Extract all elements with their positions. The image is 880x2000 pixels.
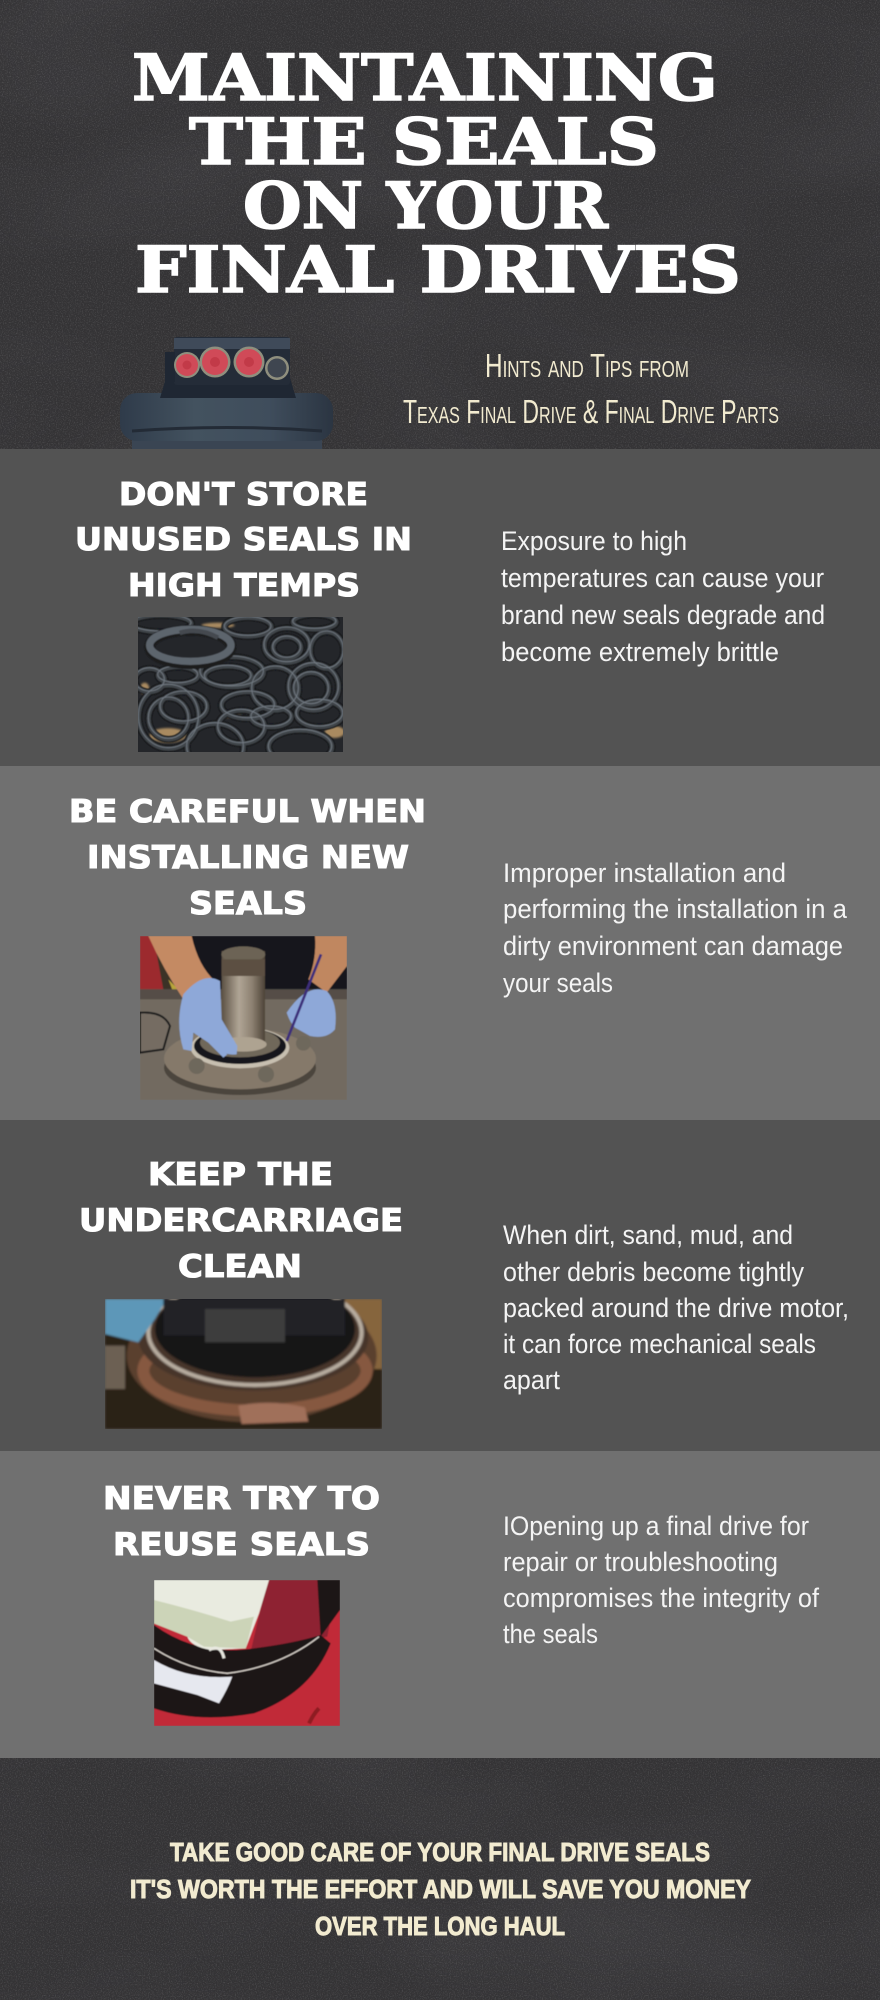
panel: don't store unused seals	[0, 449, 880, 770]
description	[501, 526, 825, 667]
heading: SEALS	[189, 886, 307, 922]
description: When dirt, sand, mud, and	[503, 1220, 793, 1250]
photo: pile of o-rings	[138, 617, 343, 752]
description	[503, 1220, 849, 1395]
title: MAINTAINING	[132, 41, 718, 116]
description: other debris become tightly	[503, 1257, 804, 1287]
description: performing the installation in a	[503, 894, 848, 924]
description: apart	[503, 1365, 560, 1395]
description: packed around the drive motor,	[503, 1293, 849, 1323]
description: Exposure to high	[501, 526, 687, 556]
description: it can force mechanical seals	[503, 1329, 816, 1359]
heading	[75, 477, 412, 604]
description: become extremely brittle	[501, 637, 779, 667]
closing message: IT'S WORTH THE EFFORT AND WILL SAVE YOU MONEY	[130, 1876, 751, 1904]
heading	[69, 794, 426, 922]
closing message: OVER THE LONG HAUL	[315, 1913, 565, 1941]
title	[132, 41, 741, 308]
subtitle: Hints and Tips from	[485, 347, 689, 384]
heading: CLEAN	[178, 1249, 302, 1285]
heading: INSTALLING NEW	[87, 840, 409, 876]
description: brand new seals degrade and	[501, 600, 825, 630]
panel: never try to reuse seals	[0, 1451, 880, 1758]
photo: dirty seal housing	[105, 1299, 382, 1429]
description: the seals	[503, 1619, 598, 1649]
photo: gloved hands installing seal	[140, 936, 347, 1100]
panel: chalkboard footer	[0, 1758, 880, 2000]
heading	[79, 1157, 403, 1285]
title: THE SEALS	[189, 105, 659, 180]
title: ON YOUR	[243, 169, 609, 244]
description: compromises the integrity of	[503, 1583, 819, 1613]
closing message	[130, 1839, 751, 1941]
description: IOpening up a final drive for	[503, 1511, 809, 1541]
heading: UNUSED SEALS IN	[75, 522, 412, 558]
description: dirty environment can damage	[503, 931, 843, 961]
description: your seals	[503, 968, 613, 998]
description	[503, 1511, 819, 1649]
icon: final drive motor	[120, 337, 333, 449]
panel: keep the undercarriage clean	[0, 1120, 880, 1451]
heading: UNDERCARRIAGE	[79, 1203, 403, 1239]
description: Improper installation and	[503, 858, 786, 888]
heading: KEEP THE	[148, 1157, 333, 1193]
heading: HIGH TEMPS	[128, 568, 360, 604]
heading: BE CAREFUL WHEN	[69, 794, 426, 830]
description: repair or troubleshooting	[503, 1547, 778, 1577]
panel: be careful when installing	[0, 766, 880, 1120]
description	[503, 858, 848, 998]
photo: worn seal close-up	[154, 1580, 340, 1726]
description: temperatures can cause your	[501, 563, 824, 593]
subtitle	[403, 347, 779, 430]
heading: NEVER TRY TO	[103, 1481, 380, 1517]
heading: DON'T STORE	[119, 477, 368, 513]
title: FINAL DRIVES	[135, 233, 741, 308]
heading: REUSE SEALS	[113, 1527, 370, 1563]
closing message: TAKE GOOD CARE OF YOUR FINAL DRIVE SEALS	[170, 1839, 710, 1867]
heading	[103, 1481, 380, 1563]
panel: chalkboard header	[0, 0, 880, 449]
